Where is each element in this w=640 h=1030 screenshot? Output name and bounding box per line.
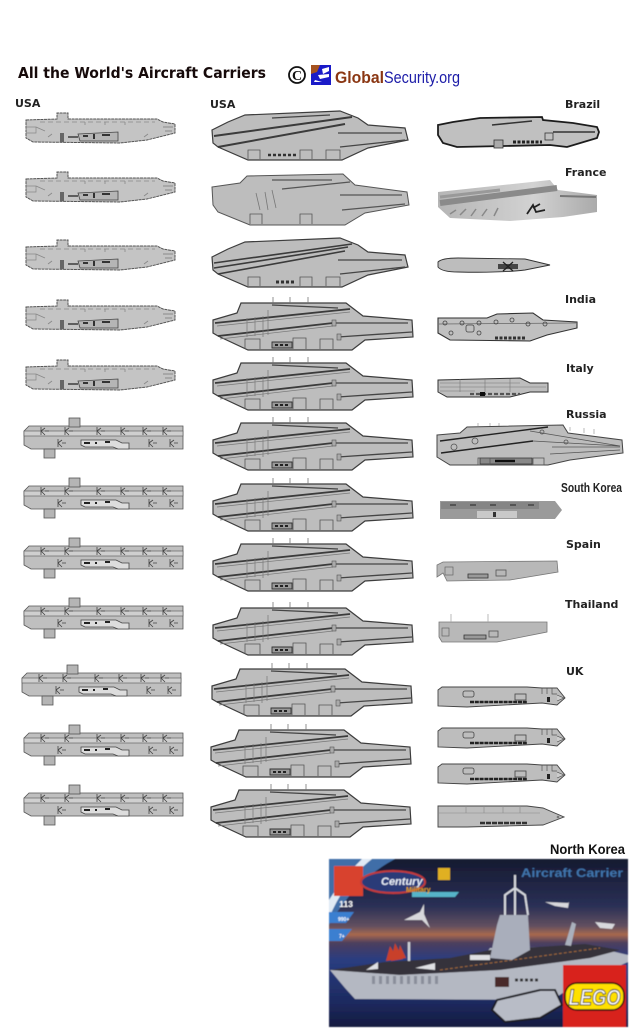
carrier: South Korea: [440, 501, 562, 519]
carrier 4: [26, 300, 175, 330]
logo: GlobalSecurity.org: [289, 65, 460, 87]
heading: Thailand: Thailand: [565, 598, 618, 611]
jets: [404, 902, 615, 929]
logo: GlobalSecurity.org: Security.org: [384, 68, 460, 87]
carrier 5: [213, 357, 413, 410]
heading: Italy: Italy: [566, 362, 594, 375]
heading: Brazil: Brazil: [565, 98, 600, 111]
carrier 6: [24, 418, 183, 458]
heading: India: India: [565, 293, 596, 306]
Century Military logo: Military: [406, 887, 431, 894]
box number and details: 7+: [339, 934, 345, 940]
heading: South Korea: South Korea: [561, 481, 623, 495]
carrier 7: [24, 478, 183, 518]
carrier: UK 1: [438, 687, 565, 707]
box number and details: 113: [339, 899, 353, 909]
box title: Aircraft Carrier: [521, 868, 624, 880]
carrier: UK 3: [438, 764, 565, 784]
carrier 5: [26, 360, 175, 390]
swoosh: [329, 859, 395, 925]
carrier: France, Charles de Gaulle: [438, 180, 597, 221]
heading: North Korea: North Korea: [550, 841, 625, 857]
carrier 6: [213, 417, 413, 470]
Century Military logo: [361, 868, 459, 897]
carrier 12: [24, 785, 183, 825]
carrier: Russia: [437, 423, 623, 465]
carrier 10: [22, 665, 181, 705]
small hovercraft: [492, 990, 562, 1022]
carrier 4: [213, 297, 413, 350]
carrier 8: [213, 538, 413, 591]
LEGO logo: LEGO: [568, 985, 620, 1010]
carrier: UK 2: [438, 728, 565, 748]
carrier: Brazil: [438, 117, 599, 148]
carrier 8: [24, 538, 183, 578]
heading: UK: UK: [566, 665, 584, 678]
heading: USA left column: USA: [15, 97, 41, 110]
carrier 3: [26, 240, 175, 270]
heading: France: France: [565, 166, 606, 179]
heading: Spain: Spain: [566, 538, 601, 551]
carrier 11: [211, 724, 411, 777]
logo: GlobalSecurity.org: Global: [335, 68, 384, 87]
panel: toy aircraft carrier box: [329, 859, 628, 1027]
LEGO logo: [563, 965, 626, 1027]
panel: USA left column carriers: [22, 113, 183, 825]
ship model: [330, 875, 628, 1000]
box number and details: 990+: [338, 917, 349, 923]
title: All the World's Aircraft Carriers: [18, 64, 266, 82]
carrier: UK 4: [438, 806, 564, 827]
carrier 2: [212, 174, 409, 225]
carrier 10: [212, 663, 412, 716]
panel: USA centre column carriers: [211, 111, 413, 837]
carrier 1: [26, 113, 175, 143]
carrier 1: [212, 111, 408, 160]
red brand box: [334, 866, 363, 896]
carrier 11: [24, 725, 183, 765]
logo: GlobalSecurity.org: C: [292, 69, 302, 84]
box number and details: [329, 899, 354, 941]
heading: USA centre column: USA: [210, 98, 236, 111]
carrier 9: [213, 602, 413, 655]
carrier: France, second: [438, 258, 550, 272]
Century Military logo: Century: [381, 876, 423, 888]
heading: Russia: Russia: [566, 408, 607, 421]
carrier 2: [26, 172, 175, 202]
carrier: Spain: [437, 561, 558, 581]
carrier 9: [24, 598, 183, 638]
carrier: Italy: [438, 378, 548, 397]
carrier: India: [438, 313, 577, 341]
carrier 12: [211, 784, 411, 837]
carrier: Thailand: [439, 614, 547, 642]
carrier 3: [212, 238, 408, 287]
carrier 7: [213, 478, 413, 531]
